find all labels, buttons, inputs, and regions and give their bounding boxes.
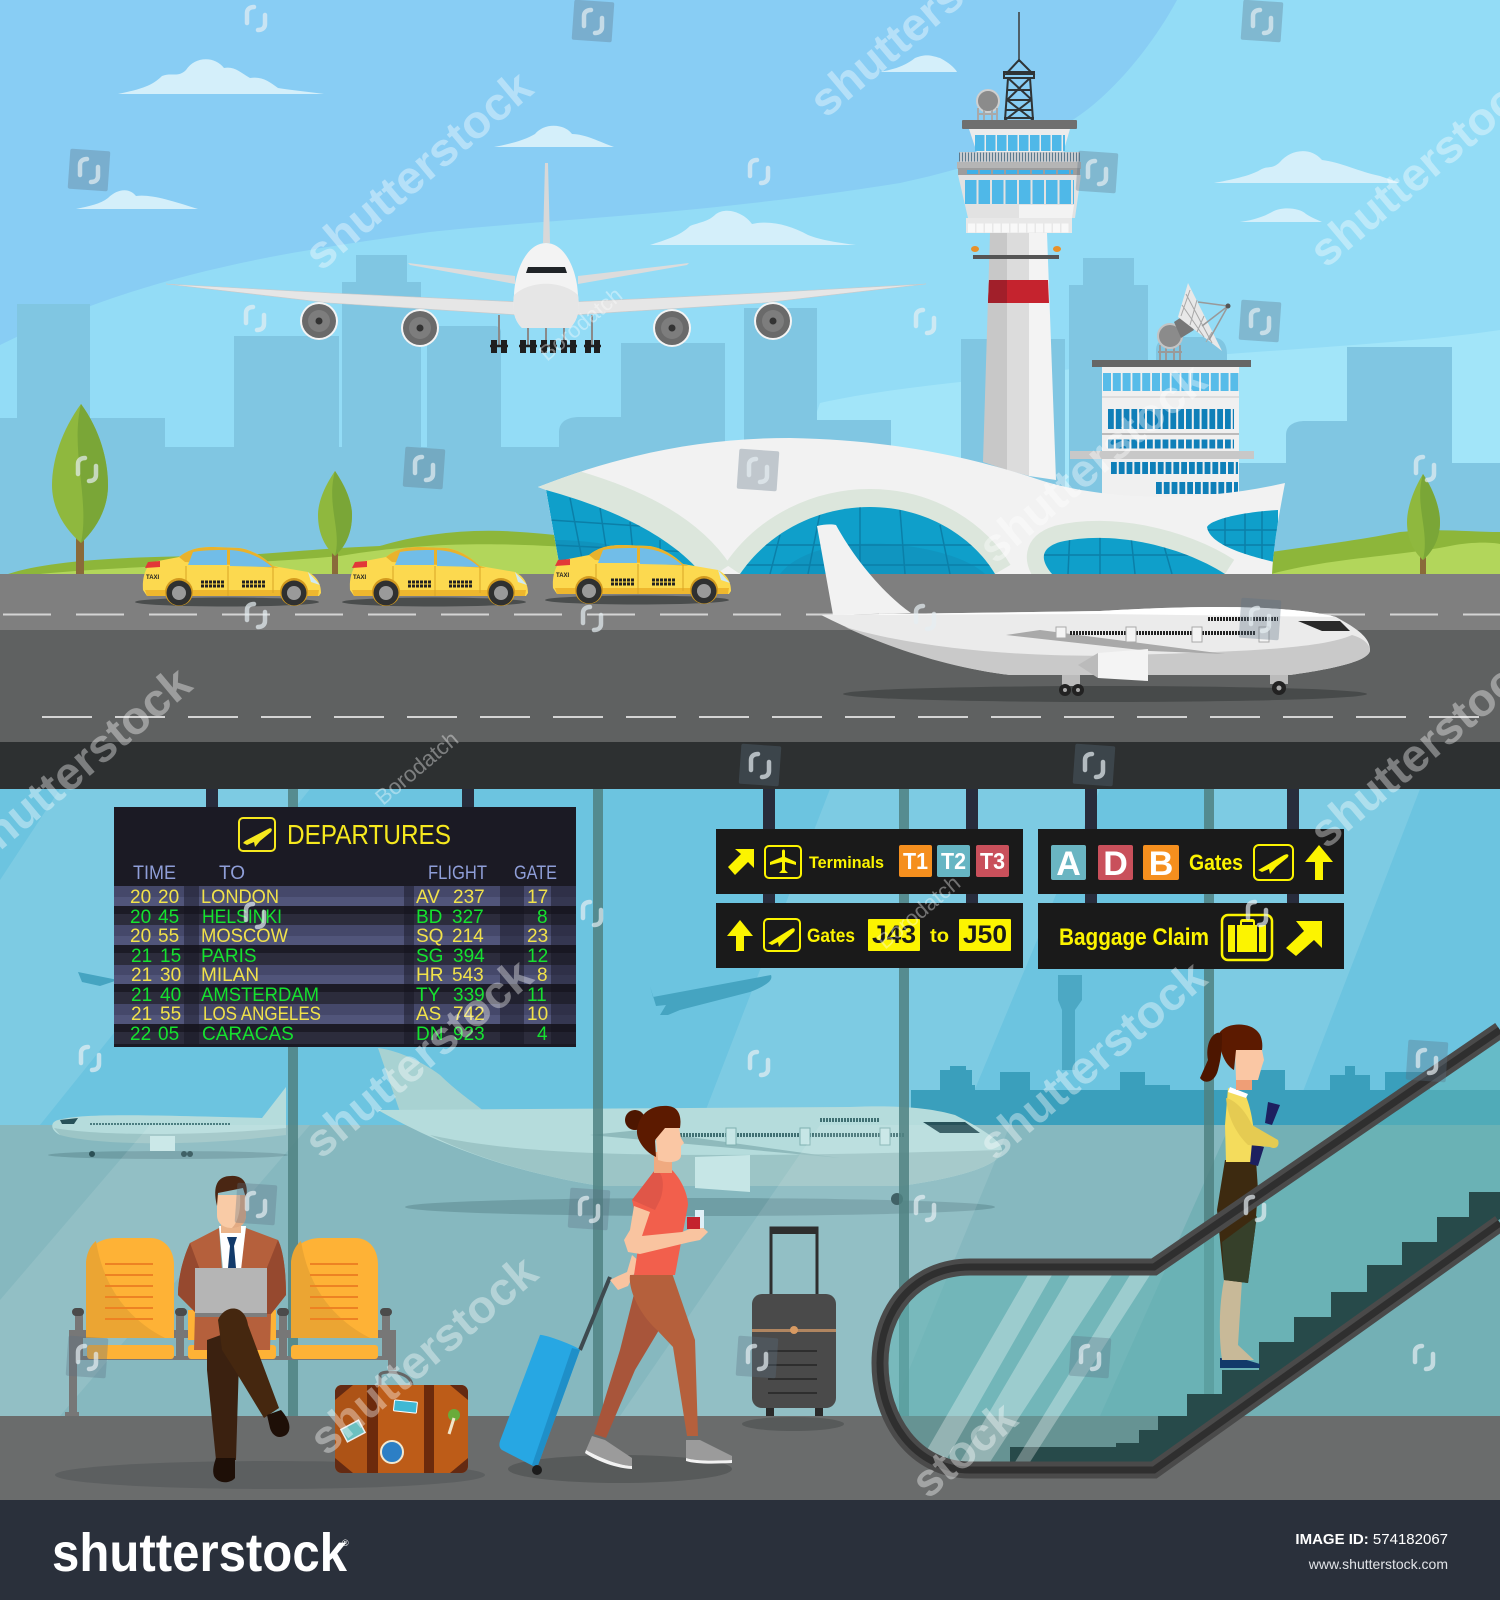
board rows text: 237 <box>453 887 485 908</box>
taxi two <box>342 547 528 606</box>
board rows text: 742 <box>453 1004 485 1025</box>
wing <box>1006 630 1225 654</box>
board rows text: 339 <box>453 985 485 1006</box>
taxi one <box>135 547 321 606</box>
sign: terminals: Terminals <box>809 853 884 872</box>
legs <box>594 1273 698 1438</box>
board title <box>239 818 451 851</box>
seat middle <box>188 1310 276 1359</box>
sign: gates J43 to J50: to <box>930 926 949 947</box>
board rows text: SG <box>416 946 443 967</box>
watermarks: shutterstock <box>294 60 542 280</box>
site url: www.shutterstock.com <box>1308 1556 1448 1572</box>
airliner shadow <box>843 686 1367 702</box>
taxi three <box>545 545 731 604</box>
apron ground <box>0 1125 1500 1416</box>
glass haze <box>0 1125 1010 1416</box>
sign: gates J43 to J50: Gates <box>807 926 855 947</box>
T2 badge: T2 <box>941 848 966 874</box>
laptop <box>195 1268 267 1317</box>
board rows text: HELSINKI <box>202 907 282 928</box>
board rows text: MILAN <box>201 965 259 986</box>
arrow up-right <box>728 849 754 875</box>
city skyline <box>0 255 1500 574</box>
A badge: A <box>1056 845 1081 883</box>
escalator glass <box>880 1030 1500 1470</box>
board header: GATE <box>514 863 557 884</box>
stickers <box>341 1400 460 1463</box>
legs <box>1220 1280 1254 1360</box>
airliner fuselage <box>513 243 579 328</box>
sign: baggage claim: Baggage Claim <box>1059 924 1209 951</box>
board rows text: 543 <box>452 965 484 986</box>
watermark marks <box>66 0 1448 1378</box>
jacket <box>178 1228 286 1350</box>
taxi one: TAXI <box>146 575 160 581</box>
board rows text: 23 <box>527 926 548 947</box>
blue suitcase <box>499 1277 610 1475</box>
footer bar <box>0 1500 1500 1600</box>
shoes <box>213 1410 289 1482</box>
cockpit <box>1298 621 1350 631</box>
control tower <box>957 12 1081 480</box>
board rows text: 923 <box>453 1024 485 1045</box>
departures icon <box>239 818 275 851</box>
head <box>1200 1024 1264 1090</box>
arrow up-right <box>1286 921 1322 956</box>
airliner wings <box>166 284 926 315</box>
escalator steps <box>1010 1192 1500 1462</box>
front leg <box>218 1309 279 1418</box>
shoes <box>585 1436 732 1469</box>
board rows text: 21 <box>131 946 152 967</box>
airliner engines <box>300 302 792 347</box>
board rows text: 20 <box>130 887 151 908</box>
distant plane left <box>78 972 118 986</box>
floor shadow <box>508 1455 732 1483</box>
board rows text: SQ <box>416 926 443 947</box>
watermarks: shutterstock <box>968 353 1216 573</box>
lower road lane <box>0 630 1500 742</box>
watermarks: shutterstock <box>294 948 542 1168</box>
board rows text: PARIS <box>201 946 257 967</box>
board rows text: 05 <box>158 1024 179 1045</box>
T1 badge <box>899 845 932 877</box>
board rows text: 20 <box>130 907 151 928</box>
board rows text: 327 <box>452 907 484 928</box>
black suitcase <box>742 1227 844 1431</box>
tree middle <box>318 471 352 574</box>
woman with blue suitcase <box>499 1106 732 1483</box>
board rows text: TY <box>416 985 441 1006</box>
watermarks: Borodatch <box>370 726 463 810</box>
watermarks: shutterstock <box>299 1245 547 1465</box>
taxi two: TAXI <box>353 575 367 581</box>
trees <box>52 404 1440 574</box>
control building <box>1070 283 1254 497</box>
image id: IMAGE ID: 574182067 <box>1295 1531 1448 1548</box>
satellite dish <box>1158 283 1230 360</box>
board rows text: 22 <box>130 1024 151 1045</box>
board header <box>133 863 557 884</box>
man <box>178 1176 289 1482</box>
departures icon <box>1254 845 1293 880</box>
tower mast <box>977 12 1034 120</box>
head <box>625 1106 684 1173</box>
window mullions <box>288 789 1214 1416</box>
departures board <box>114 807 576 1047</box>
airliner cockpit <box>526 267 567 273</box>
tower cab <box>957 120 1081 233</box>
sky background <box>0 0 1500 575</box>
B badge <box>1143 845 1179 883</box>
suitcase icon <box>1222 915 1272 960</box>
airliner landing gear <box>490 315 601 353</box>
board rows text: DN <box>416 1024 443 1045</box>
board rows text: 21 <box>131 965 152 986</box>
watermarks: stock <box>901 1390 1027 1508</box>
torso <box>1225 1088 1255 1162</box>
back arm <box>610 1255 640 1290</box>
J50 badge: J50 <box>963 921 1007 949</box>
board rows text: 21 <box>131 1004 152 1025</box>
board rows text: 8 <box>537 907 548 928</box>
board rows text: 21 <box>131 985 152 1006</box>
arm <box>1226 1098 1279 1148</box>
airliner tail fin <box>543 163 550 243</box>
board rows text: 11 <box>527 985 547 1006</box>
glass arch right <box>1040 525 1225 574</box>
arrow up <box>1305 845 1333 880</box>
board rows text: 20 <box>130 926 151 947</box>
sign: baggage claim <box>1038 903 1344 969</box>
board title: DEPARTURES <box>287 819 451 850</box>
watermarks: Borodatch <box>534 282 627 366</box>
woman on escalator <box>1200 1024 1280 1368</box>
D badge: D <box>1103 845 1128 883</box>
back leg <box>207 1328 240 1460</box>
dark ceiling band <box>0 742 1500 789</box>
board header: TIME <box>133 863 176 884</box>
board rows text: HR <box>416 965 443 986</box>
left parked plane <box>48 1087 288 1159</box>
board rows text: 394 <box>453 946 485 967</box>
head <box>215 1176 247 1233</box>
clouds <box>76 55 1400 245</box>
collar <box>1228 1087 1248 1098</box>
front arm <box>624 1206 708 1254</box>
sign: gates A D B <box>1038 829 1344 894</box>
glass arch far right <box>1207 510 1278 562</box>
handrail <box>880 1030 1500 1470</box>
glass arch left <box>530 476 716 574</box>
engine <box>1098 649 1148 681</box>
shirt and tie <box>219 1226 246 1270</box>
registered mark: ® <box>342 1538 349 1548</box>
distant skyline <box>911 1066 1500 1125</box>
seats and man <box>55 1176 485 1489</box>
skirt lower tint <box>1222 1216 1257 1283</box>
T1 badge: T1 <box>903 848 928 874</box>
board rows text: 20 <box>158 887 179 908</box>
T2 badge <box>937 845 970 877</box>
board rows text: AS <box>416 1004 441 1025</box>
tree left <box>52 404 108 574</box>
watermarks: shutterstock <box>968 950 1216 1170</box>
sign hangers <box>206 789 1299 904</box>
board rows text: 45 <box>158 907 179 928</box>
upper road lane <box>0 574 1500 630</box>
seat left <box>86 1238 174 1359</box>
floor <box>0 1416 1500 1500</box>
torso <box>632 1170 688 1275</box>
road dashes <box>3 614 1500 717</box>
taxi three: TAXI <box>556 573 570 579</box>
board rows text <box>130 887 548 1045</box>
shoes <box>1220 1358 1260 1368</box>
board rows text: 55 <box>158 926 179 947</box>
board rows text: MOSCOW <box>201 926 288 947</box>
T3 badge <box>976 845 1009 877</box>
board rows text: BD <box>416 907 442 928</box>
board rows text: 40 <box>160 985 181 1006</box>
floor shadow <box>55 1461 485 1489</box>
glass arch centre <box>740 507 995 574</box>
green hills <box>8 530 1500 574</box>
sign: gates J43 to J50 <box>716 903 1023 968</box>
board rows text: 17 <box>527 887 548 908</box>
B badge: B <box>1149 845 1173 883</box>
seat right <box>291 1238 378 1359</box>
escalator <box>880 1024 1500 1470</box>
landing gear <box>1059 675 1288 696</box>
board rows text: LOS ANGELES <box>203 1004 321 1025</box>
board rows text: LONDON <box>201 887 279 908</box>
board header: TO <box>219 863 245 884</box>
J43 badge: J43 <box>872 921 916 949</box>
board rows text: 30 <box>160 965 181 986</box>
board header: FLIGHT <box>428 863 487 884</box>
window reflections <box>0 789 1420 1125</box>
board rows text: 214 <box>452 926 484 947</box>
tree right <box>1407 474 1440 574</box>
parked airliner side view <box>817 524 1370 702</box>
interior window scene <box>0 789 1500 1500</box>
board rows text: 10 <box>527 1004 548 1025</box>
skirt <box>1217 1160 1258 1283</box>
escalator glass reflections <box>920 1275 1150 1462</box>
landing airliner front view <box>166 163 926 353</box>
airliner tailplane <box>408 263 689 284</box>
tail <box>817 524 911 615</box>
board rows text: 8 <box>537 965 548 986</box>
apron right tint <box>1100 1125 1500 1416</box>
arrow up <box>727 920 753 951</box>
terminal building <box>530 438 1285 574</box>
sign: gates A D B: Gates <box>1189 850 1243 875</box>
brown suitcase <box>335 1372 468 1473</box>
board rows text: 55 <box>160 1004 181 1025</box>
distant flying plane <box>650 975 771 1015</box>
fuselage <box>821 607 1370 675</box>
book <box>1250 1102 1280 1166</box>
footer logo: shutterstock <box>52 1523 348 1583</box>
distant tower <box>1058 975 1082 1070</box>
board rows <box>114 886 576 1044</box>
boarding pass <box>687 1210 704 1229</box>
windows <box>1056 619 1278 642</box>
board rows text: 4 <box>537 1024 548 1045</box>
board rows text: CARACAS <box>202 1024 294 1045</box>
T3 badge: T3 <box>980 848 1005 874</box>
sign: terminals <box>716 829 1023 894</box>
tower shaft <box>971 233 1061 480</box>
board rows text: 12 <box>527 946 548 967</box>
watermarks: Borodatch <box>872 870 965 954</box>
board rows text: AMSTERDAM <box>201 985 319 1006</box>
departures icon <box>764 919 800 951</box>
board rows text: 15 <box>160 946 181 967</box>
board rows text: AV <box>416 887 440 908</box>
main parked plane through glass <box>378 1048 1002 1216</box>
seat frame <box>65 1308 396 1416</box>
plane icon <box>765 846 801 878</box>
